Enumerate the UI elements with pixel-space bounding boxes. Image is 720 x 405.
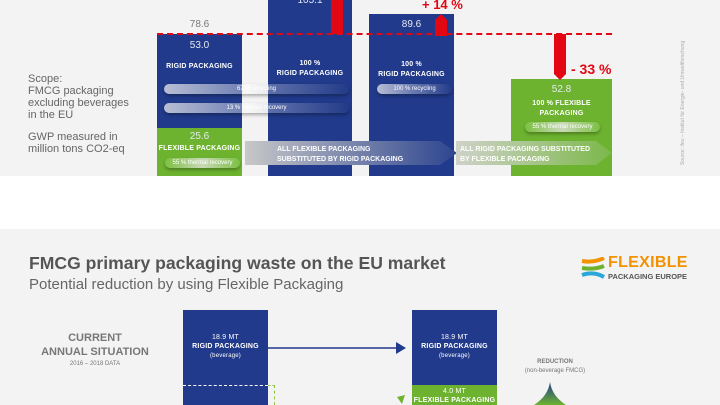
bar 3: 100% rigid recycled: 89.6	[402, 19, 421, 30]
bar 4: 100% flexible: 100 % FLEXIBLE	[532, 100, 591, 107]
red arrow +14	[435, 14, 447, 36]
arrow banner: rigid substituted by flexible	[456, 141, 612, 165]
flexible segment	[157, 128, 242, 176]
bar 3: 100% rigid recycled: 100 %	[401, 61, 422, 68]
scope text: Scope:	[28, 73, 62, 85]
arrow banner: rigid substituted by flexible: ALL RIGID PACKAGING SUBSTITUTED	[460, 146, 590, 153]
GWP text: million tons CO2-eq	[28, 143, 125, 155]
flexible segment: FLEXIBLE PACKAGING	[159, 145, 240, 152]
bar 3: 100% rigid recycled: RIGID PACKAGING	[378, 71, 445, 78]
bar A: current	[183, 310, 268, 405]
rigid segment	[157, 34, 242, 128]
rigid segment: 53.0	[190, 40, 209, 51]
current situation label	[41, 332, 149, 367]
bar A: current: RIGID PACKAGING	[192, 343, 259, 350]
scope text: excluding beverages	[28, 97, 129, 109]
scope text: in the EU	[28, 109, 73, 121]
logo text: FLEXIBLE	[608, 254, 688, 271]
bar 4: 100% flexible: 52.8	[552, 84, 571, 95]
bar B: potential	[412, 310, 497, 405]
logo icon	[581, 257, 605, 279]
logo: PACKAGING EUROPE	[608, 272, 687, 281]
bar B: potential: 18.9 MT	[441, 334, 468, 341]
bar 3: 100% rigid recycled	[369, 14, 454, 176]
recycling bands	[164, 84, 349, 94]
arrow banner: flexible substituted by rigid: ALL FLEXIBLE PACKAGING	[277, 146, 371, 153]
rigid segment: RIGID PACKAGING	[166, 63, 233, 70]
green dashed connector	[274, 385, 275, 405]
bar 4: 100% flexible: PACKAGING	[539, 110, 584, 117]
text: 13 % thermal recovery	[226, 105, 287, 111]
text: 100 % recycling	[393, 86, 436, 92]
bar A: current: (beverage)	[210, 353, 241, 359]
bar B: potential: (beverage)	[439, 353, 470, 359]
bar 4: 100% flexible	[511, 79, 612, 176]
reduction label: REDUCTION	[537, 359, 573, 365]
bottom subtitle: Potential reduction by using Flexible Packaging	[29, 276, 343, 293]
bar B: potential: FLEXIBLE PACKAGING	[414, 397, 495, 404]
GWP text	[28, 131, 125, 155]
dashed baseline	[157, 33, 612, 35]
bar 1: current mix	[157, 19, 242, 176]
bottom title: FMCG primary packaging waste on the EU market	[29, 253, 446, 273]
red increase bar 2	[331, 0, 343, 34]
bar 2: 100% rigid: 100 %	[300, 60, 320, 67]
current situation label: CURRENT	[68, 332, 122, 344]
current situation label: ANNUAL SITUATION	[41, 346, 149, 358]
green arrow head	[397, 395, 405, 404]
bar 2: 100% rigid: RIGID PACKAGING	[277, 70, 343, 77]
arrow banner: rigid substituted by flexible: BY FLEXIBLE PACKAGING	[460, 156, 550, 163]
scope text: FMCG packaging	[28, 85, 114, 97]
recycling bands: 67 % recycling	[237, 86, 276, 92]
reduction drop	[534, 382, 566, 405]
reduction label	[525, 358, 585, 374]
GWP text: GWP measured in	[28, 131, 118, 143]
bar B: potential: RIGID PACKAGING	[421, 343, 488, 350]
bar A: current: 18.9 MT	[212, 334, 239, 341]
arrow banner: flexible substituted by rigid: SUBSTITUTED BY RIGID PACKAGING	[277, 156, 404, 163]
bar 2: 100% rigid	[268, 0, 352, 176]
red arrow -33	[554, 34, 566, 80]
top panel background	[0, 0, 720, 176]
scope text	[28, 73, 129, 121]
reduction label: (non-beverage FMCG)	[525, 368, 585, 374]
current situation label: 2016 – 2018 DATA	[70, 361, 120, 367]
arrow: beverage carried	[268, 342, 406, 354]
text: 55 % thermal recovery	[532, 124, 593, 130]
text: 55 % thermal recovery	[172, 160, 233, 166]
arrow banner: flexible substituted by rigid	[245, 141, 456, 165]
bar B: potential: 4.0 MT	[443, 388, 466, 395]
bottom panel background	[0, 229, 720, 405]
source vertical text: Source: ifeu – Institut für Energie- und Umweltforschung	[680, 41, 686, 165]
label -33 %: - 33 %	[571, 61, 611, 77]
value 78.6: 78.6	[190, 19, 209, 30]
logo	[581, 254, 688, 281]
flexible segment: 25.6	[190, 131, 209, 142]
